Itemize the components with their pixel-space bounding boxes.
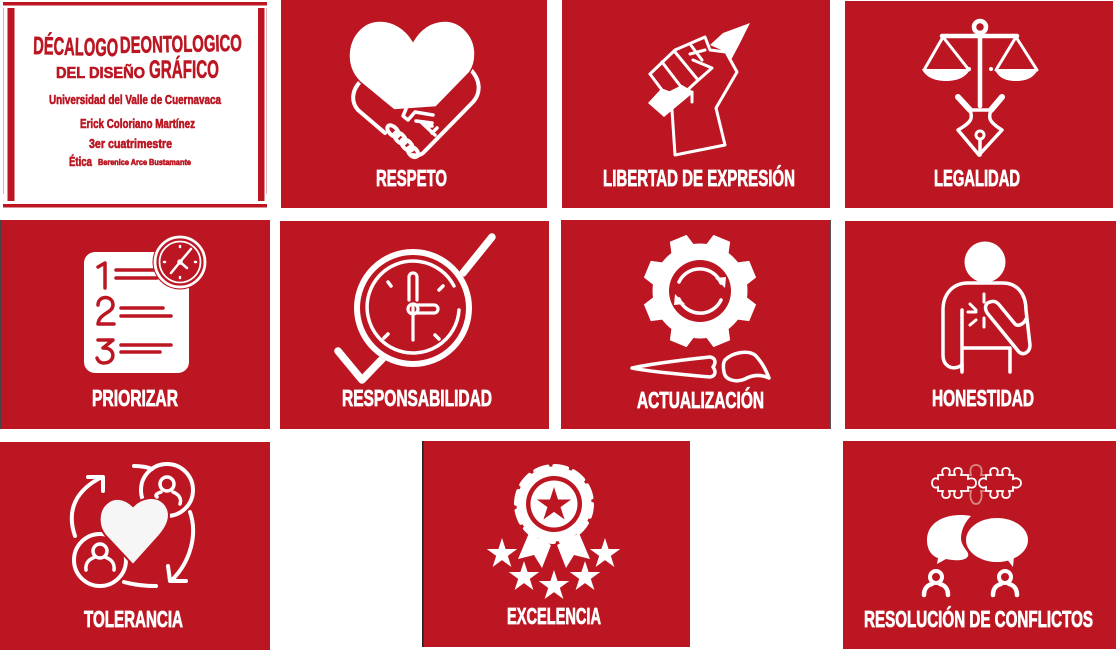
label: excelencia: EXCELENCIA: [507, 603, 601, 629]
label: legalidad: LEGALIDAD: [934, 165, 1020, 191]
panel: resolucion de conflictos: [843, 441, 1116, 649]
text: university: Universidad del Valle de Cuernavaca: [49, 92, 222, 107]
text: subject and teacher: [69, 154, 191, 169]
label: priorizar: PRIORIZAR: [92, 385, 178, 411]
icon: award badge with stars: [487, 466, 620, 599]
icon: heart and handshake: [349, 21, 479, 159]
panel: honestidad: [845, 221, 1116, 429]
heading: main title: GRÁFICO: [149, 55, 219, 84]
panel: title card: [3, 2, 267, 208]
icon: heart, people and arrows: [72, 464, 193, 586]
icon: speech bubbles: [927, 515, 1028, 567]
heading: main title: DÉCALOGO: [33, 31, 119, 62]
icon: clock with check mark: [338, 237, 492, 380]
label: libertad de expresion: LIBERTAD DE EXPRESIÓN: [603, 164, 795, 191]
text: term: 3er cuatrimestre: [89, 137, 172, 151]
label: actualizacion: ACTUALIZACIÓN: [637, 386, 764, 413]
panel: libertad de expresion: [562, 0, 830, 208]
icon: two people: [924, 571, 1017, 595]
text: subject and teacher: Berenice Arce Bustamante: [98, 157, 191, 167]
icon: scales and pen nib: [922, 21, 1038, 155]
icon: person with hand on chest: [943, 242, 1030, 372]
icon: fist holding pen: [648, 23, 750, 155]
icon: gear and paintbrush: [632, 233, 769, 381]
panel: actualizacion: [561, 220, 831, 429]
label: tolerancia: TOLERANCIA: [84, 606, 183, 632]
text: author: Erick Coloriano Martínez: [80, 117, 195, 131]
panel: responsabilidad: [280, 221, 549, 429]
icon: numbered list with clock: [84, 234, 208, 373]
panel: tolerancia: [0, 442, 270, 650]
label: respeto: RESPETO: [376, 165, 447, 191]
heading: main title: DEONTOLOGICO: [120, 30, 242, 58]
label: honestidad: HONESTIDAD: [932, 385, 1034, 411]
panel: legalidad: [845, 1, 1113, 208]
icon: puzzle pieces: [932, 465, 1021, 504]
heading: main title: DEL DISEÑO: [56, 62, 145, 82]
text: subject and teacher: Ética: [69, 154, 93, 169]
heading: main title: [33, 30, 242, 84]
panel: respeto: [281, 0, 547, 208]
panel: excelencia: [422, 441, 690, 647]
panel: priorizar: [0, 220, 270, 429]
label: responsabilidad: RESPONSABILIDAD: [342, 385, 492, 411]
